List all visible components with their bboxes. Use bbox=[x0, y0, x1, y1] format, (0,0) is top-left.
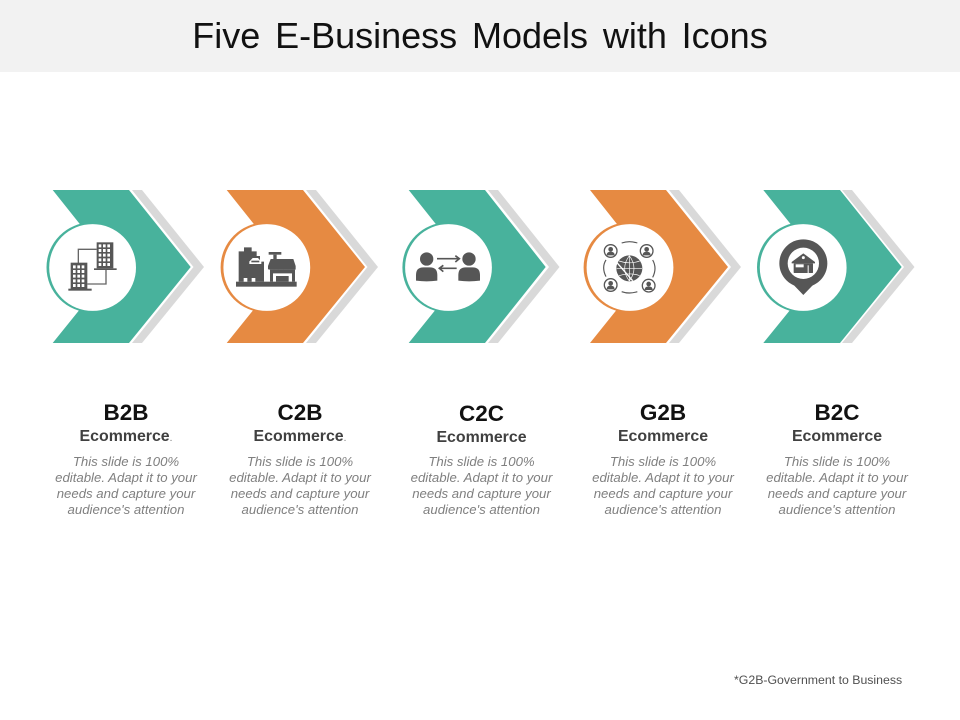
text: G2B description: editable. Adapt it to your bbox=[592, 470, 734, 485]
text: B2B description: audience's attention bbox=[68, 502, 184, 517]
text: B2C description bbox=[766, 454, 908, 517]
label: G2B: Ecommerce bbox=[618, 428, 708, 445]
text: C2C description: editable. Adapt it to your bbox=[411, 470, 552, 485]
label: B2B bbox=[80, 400, 172, 445]
label: C2B: C2B bbox=[277, 400, 322, 425]
label: C2C: C2C bbox=[459, 401, 504, 426]
text: B2C description: audience's attention bbox=[779, 502, 895, 517]
label: C2C bbox=[436, 401, 527, 446]
text: G2B description: This slide is 100% bbox=[610, 454, 716, 469]
title band bbox=[0, 0, 960, 72]
label: B2C: B2C bbox=[814, 400, 860, 425]
text: B2B description: editable. Adapt it to your bbox=[55, 470, 197, 485]
label: C2B: Ecommerce. bbox=[254, 428, 346, 445]
text: G2B description: audience's attention bbox=[605, 502, 721, 517]
text: B2B description: needs and capture your bbox=[57, 486, 195, 501]
text: C2B description bbox=[229, 454, 372, 517]
text: C2B description: editable. Adapt it to your bbox=[229, 470, 371, 485]
text: C2C description: needs and capture your bbox=[412, 486, 551, 501]
text: B2C description: needs and capture your bbox=[768, 486, 906, 501]
chevron 2: C2B bbox=[221, 190, 378, 343]
text: C2C description: This slide is 100% bbox=[428, 454, 535, 469]
label: B2B: Ecommerce. bbox=[80, 428, 172, 445]
label: B2C: Ecommerce bbox=[792, 428, 882, 445]
label: C2B bbox=[254, 400, 346, 445]
icon: factory and store bbox=[236, 247, 297, 287]
chevron 1: B2B bbox=[46, 190, 204, 343]
icon: globe with network of people bbox=[604, 242, 655, 293]
text: C2B description: This slide is 100% bbox=[247, 454, 353, 469]
chevron 3: C2C bbox=[402, 190, 560, 343]
text: B2B description: This slide is 100% bbox=[73, 454, 179, 469]
title: Five E-Business Models with Icons bbox=[192, 15, 768, 56]
text: C2C description bbox=[411, 454, 553, 517]
chevron 4: G2B bbox=[584, 190, 741, 343]
text: C2B description: audience's attention bbox=[242, 502, 358, 517]
text: G2B description: needs and capture your bbox=[594, 486, 732, 501]
label: G2B bbox=[618, 400, 708, 445]
text: C2C description: audience's attention bbox=[423, 502, 540, 517]
text: C2B description: needs and capture your bbox=[231, 486, 369, 501]
label: C2C: Ecommerce bbox=[436, 429, 527, 446]
label: B2B: B2B bbox=[103, 400, 148, 425]
icon: location pin with shop bbox=[779, 239, 827, 295]
text: G2B description bbox=[592, 454, 734, 517]
text: B2C description: This slide is 100% bbox=[784, 454, 890, 469]
footnote: *G2B-Government to Business bbox=[734, 673, 902, 687]
text: B2B description bbox=[55, 454, 198, 517]
label: G2B: G2B bbox=[640, 400, 686, 425]
icon: two people exchanging bbox=[416, 252, 480, 281]
chevron 5: B2C bbox=[757, 190, 914, 343]
icon: connected office buildings bbox=[68, 242, 117, 291]
label: B2C bbox=[792, 400, 882, 445]
text: B2C description: editable. Adapt it to your bbox=[766, 470, 908, 485]
